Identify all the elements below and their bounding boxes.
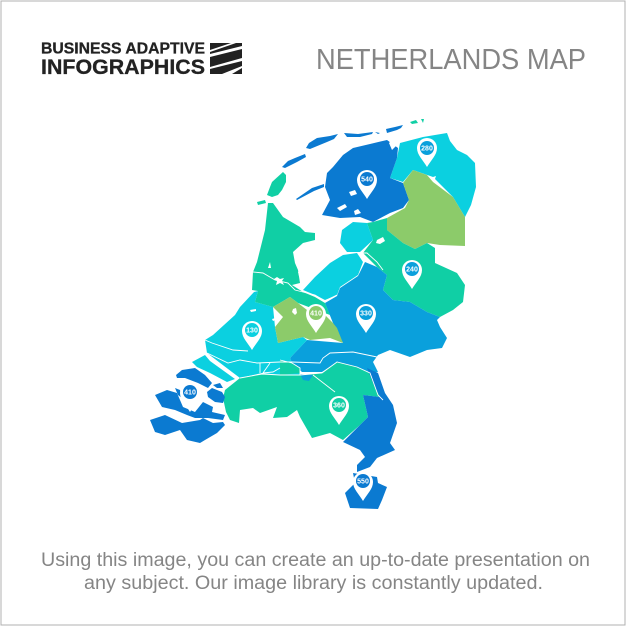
pin: 410 Utrecht: 410 <box>310 310 322 318</box>
province: Groningen <box>390 133 476 217</box>
province: Drenthe <box>387 170 465 249</box>
description text: any subject. Our image library is constantly updated. <box>84 573 543 594</box>
description text <box>41 550 590 594</box>
logo text: INFOGRAPHICS <box>41 56 205 79</box>
river island: blue <box>300 374 313 381</box>
pin: 550 <box>353 472 373 501</box>
title: NETHERLANDS MAP <box>316 44 586 76</box>
pin: 240 <box>402 260 422 289</box>
province: Overijssel <box>363 218 465 317</box>
pin: 330: 330 <box>360 310 372 318</box>
map of the Netherlands <box>150 119 476 509</box>
province: Wadden islands <box>282 125 403 168</box>
island: Texel <box>257 119 424 205</box>
province: Limburg south <box>345 473 387 509</box>
description text: Using this image, you can create an up-to-date presentation on <box>41 550 590 571</box>
pin: 130 <box>242 321 262 350</box>
pin: 540: 540 <box>361 176 373 184</box>
province: North Holland <box>252 203 330 315</box>
pin: 240: 240 <box>406 266 418 274</box>
island: Goeree <box>192 355 235 382</box>
rivers <box>205 253 387 400</box>
pin: 550: 550 <box>357 478 369 486</box>
province: Zeeland <box>150 368 225 443</box>
logo <box>41 40 242 79</box>
logo text: BUSINESS ADAPTIVE <box>41 40 205 58</box>
pin: 360 <box>329 396 349 425</box>
logo text <box>41 40 205 79</box>
province: South Holland <box>205 291 307 378</box>
province: Limburg north <box>343 368 397 472</box>
causeway <box>296 184 324 200</box>
pin: 280: 280 <box>421 146 433 152</box>
pin: 360: 360 <box>333 402 345 410</box>
pin: 410 Utrecht <box>306 304 326 333</box>
river island: green <box>280 360 300 375</box>
lakes and specks <box>250 140 436 321</box>
pin: 280 <box>417 138 437 167</box>
province: North Brabant <box>223 362 380 440</box>
province: Utrecht <box>273 297 343 343</box>
pin: 330 <box>356 304 376 333</box>
pin: 410 Zeeland: 410 <box>184 390 196 396</box>
pin: 130: 130 <box>246 328 258 334</box>
pin: 540 <box>357 170 377 199</box>
province: Flevoland <box>303 253 363 300</box>
region: Noordoostpolder <box>340 222 373 252</box>
province: Gelderland <box>290 262 447 373</box>
logo icon: stripes <box>210 43 242 74</box>
pin: 410 Zeeland <box>180 383 200 412</box>
province: Friesland <box>322 140 409 222</box>
